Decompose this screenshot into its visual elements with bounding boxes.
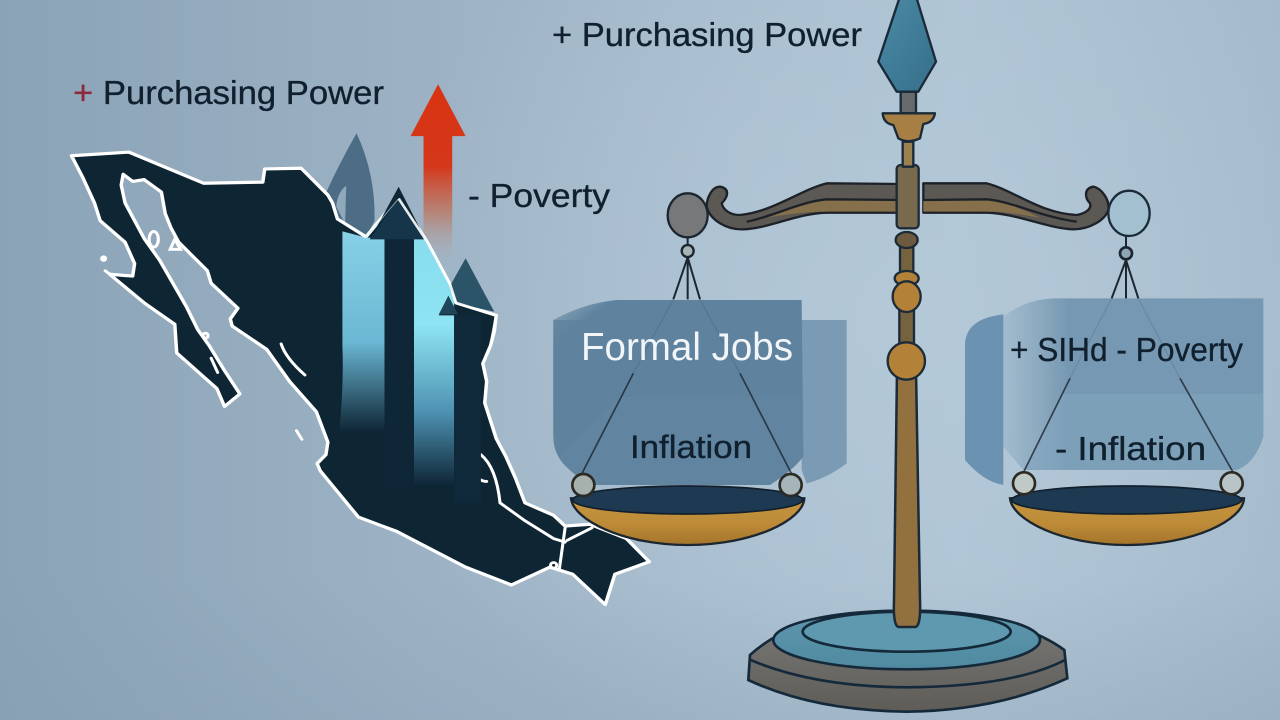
label: left purchasing power: + Purchasing Power (73, 74, 384, 111)
scale stand (707, 0, 1109, 712)
light column 2 (414, 239, 454, 485)
arrow: muted arrow behind the map (327, 133, 375, 237)
central post (894, 370, 920, 627)
post ornaments (888, 165, 925, 380)
map islands and coastal lines (105, 231, 592, 569)
map of Mexico (71, 152, 649, 605)
pan bowl (571, 498, 804, 545)
left hanging pan (571, 193, 804, 545)
chains (1023, 237, 1233, 473)
chains (582, 238, 792, 474)
label: top purchasing power: + Purchasing Power (552, 16, 862, 53)
arrow: red rising arrow (411, 84, 466, 265)
light column 1 (339, 231, 384, 431)
finial (878, 0, 936, 167)
left beam (707, 183, 903, 229)
panel: right scale card (965, 298, 1263, 485)
right hanging pan (1010, 191, 1244, 545)
right beam (923, 183, 1109, 229)
right arrow (439, 296, 481, 503)
panel: left scale card (553, 300, 847, 485)
left ball (668, 193, 708, 237)
label: left inflation: Inflation (630, 429, 752, 465)
redrawn coast line (337, 199, 496, 364)
dark centre arrow (370, 187, 425, 489)
label: map poverty: - Poverty (468, 177, 611, 214)
pan bowl (1010, 498, 1244, 545)
label: formal jobs: Formal Jobs (581, 326, 793, 369)
label: right inflation: - Inflation (1055, 430, 1206, 467)
label: right poverty: + SIHd - Poverty (1010, 331, 1243, 368)
rising arrows over the map (337, 187, 496, 503)
right ball (1108, 191, 1150, 236)
icon: base (748, 611, 1067, 712)
